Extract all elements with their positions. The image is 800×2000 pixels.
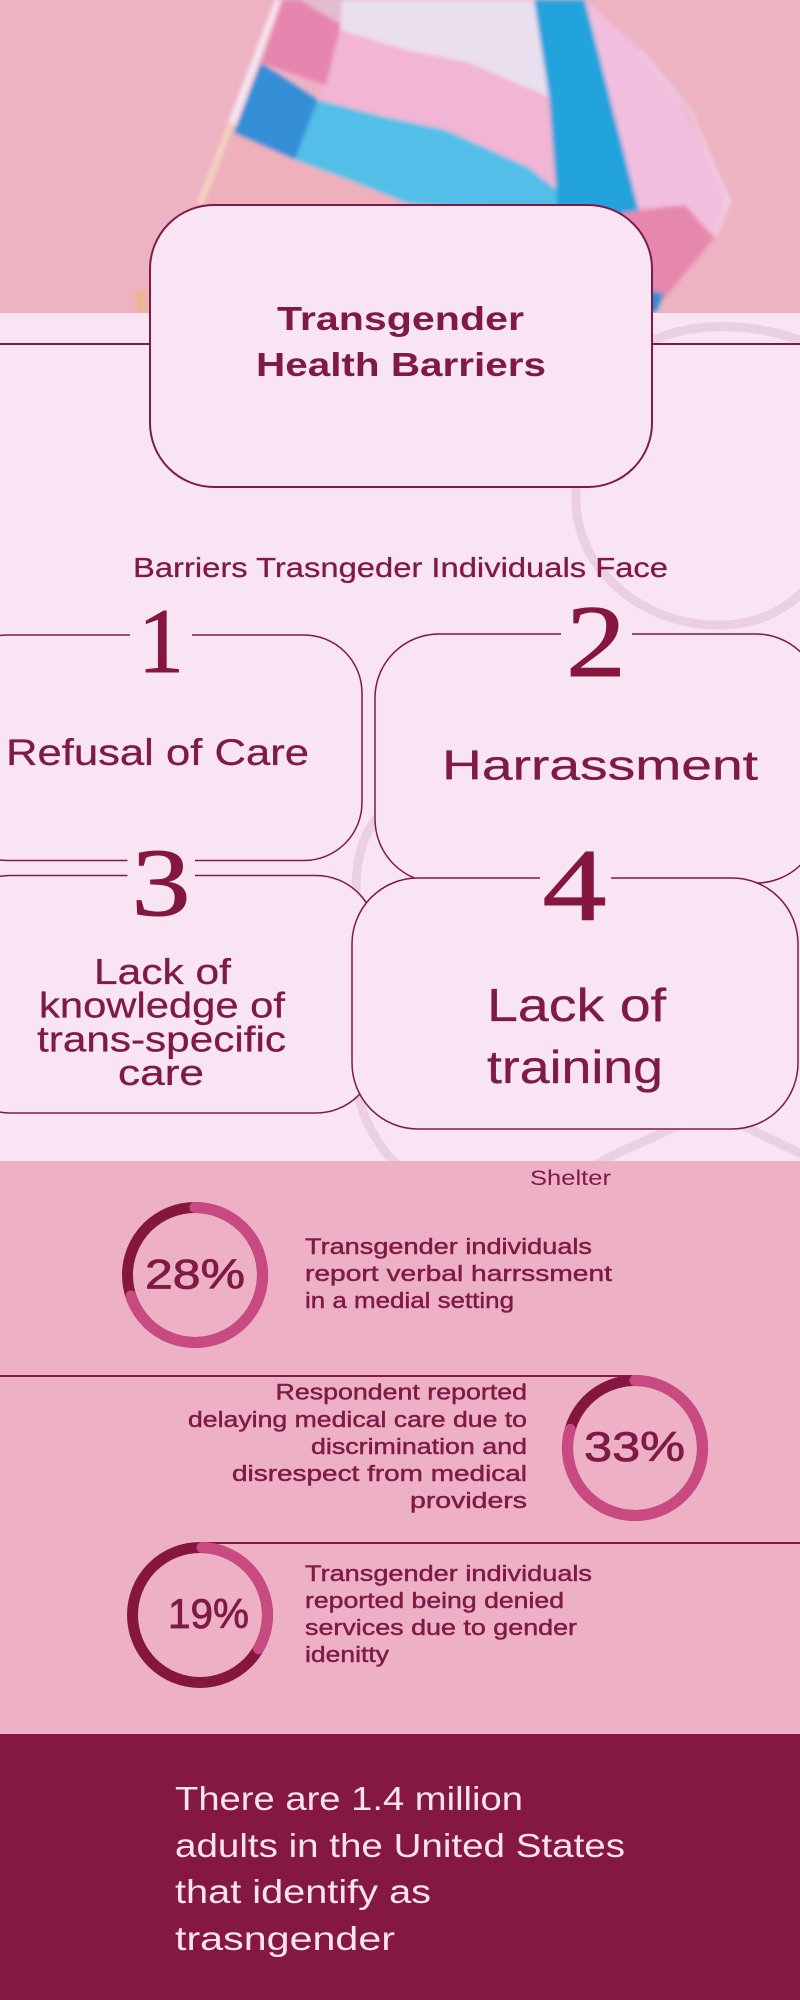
card 1 label: Refusal of Care [6, 732, 309, 773]
card 3: lack of knowledge: 3 [132, 829, 190, 936]
card 2: harrassment [375, 585, 800, 883]
card 2 label: Harrassment [442, 742, 758, 788]
divider line 1 [0, 1375, 632, 1377]
stat text: 28%: in a medial setting [305, 1288, 514, 1313]
statistics panel background [0, 1161, 800, 1734]
card 1: refusal of care [0, 590, 362, 860]
card 4 label [487, 979, 666, 1093]
stat text: 33%: providers [410, 1488, 527, 1513]
title text: Health Barriers [256, 346, 546, 383]
title box [150, 205, 652, 487]
card 4 label: training [487, 1041, 663, 1093]
card 3 label: care [118, 1052, 204, 1093]
shelter label: Shelter [530, 1167, 611, 1190]
donut: 33%: 33% [584, 1423, 685, 1470]
title text: Transgender [277, 300, 524, 337]
card 4: lack of training [352, 829, 798, 1129]
card 3: lack of knowledge [0, 829, 376, 1113]
stat text: 28% [305, 1234, 612, 1313]
section heading: Barriers Trasngeder Individuals Face [133, 552, 668, 583]
footer panel [0, 1734, 800, 2000]
footer text: that identify as [175, 1873, 431, 1910]
card 3 label [37, 951, 286, 1093]
donut: 19% [132, 1548, 268, 1682]
stat text: 33%: discrimination and [311, 1434, 527, 1459]
donut: 33% [568, 1380, 703, 1516]
donut: 28%: 28% [145, 1250, 245, 1298]
footer text [175, 1780, 625, 1957]
footer text: adults in the United States [175, 1827, 625, 1864]
card 1: refusal of care: 1 [138, 590, 184, 692]
stat text: 28%: Transgender individuals [305, 1234, 592, 1259]
stat text: 19%: services due to gender [305, 1615, 577, 1640]
stat text: 19%: idenitty [305, 1642, 389, 1667]
light content background [0, 313, 800, 1161]
card 4 label: Lack of [487, 979, 666, 1031]
stat text: 19%: reported being denied [305, 1588, 564, 1613]
hero background with flag [0, 0, 800, 313]
stat text: 19% [305, 1561, 592, 1667]
footer text: There are 1.4 million [175, 1780, 523, 1817]
card 2: harrassment: 2 [566, 585, 626, 699]
stat text: 19%: Transgender individuals [305, 1561, 592, 1586]
card 4: lack of training: 4 [542, 829, 606, 943]
donut: 19%: 19% [168, 1590, 249, 1637]
stat text: 33% [188, 1380, 527, 1513]
decorative blob outlines [356, 327, 800, 1170]
divider line 2 [204, 1542, 800, 1544]
card 3 label: trans-specific [37, 1018, 286, 1060]
card 3 label: Lack of [94, 951, 232, 992]
donut: 28% [128, 1207, 263, 1342]
card 3 label: knowledge of [39, 984, 286, 1026]
stat text: 33%: Respondent reported [276, 1380, 527, 1404]
stat text: 33%: disrespect from medical [232, 1461, 527, 1486]
divider line behind title [0, 343, 800, 345]
stat text: 33%: delaying medical care due to [188, 1407, 527, 1432]
stat text: 28%: report verbal harrssment [305, 1261, 612, 1286]
footer text: trasngender [175, 1920, 395, 1957]
